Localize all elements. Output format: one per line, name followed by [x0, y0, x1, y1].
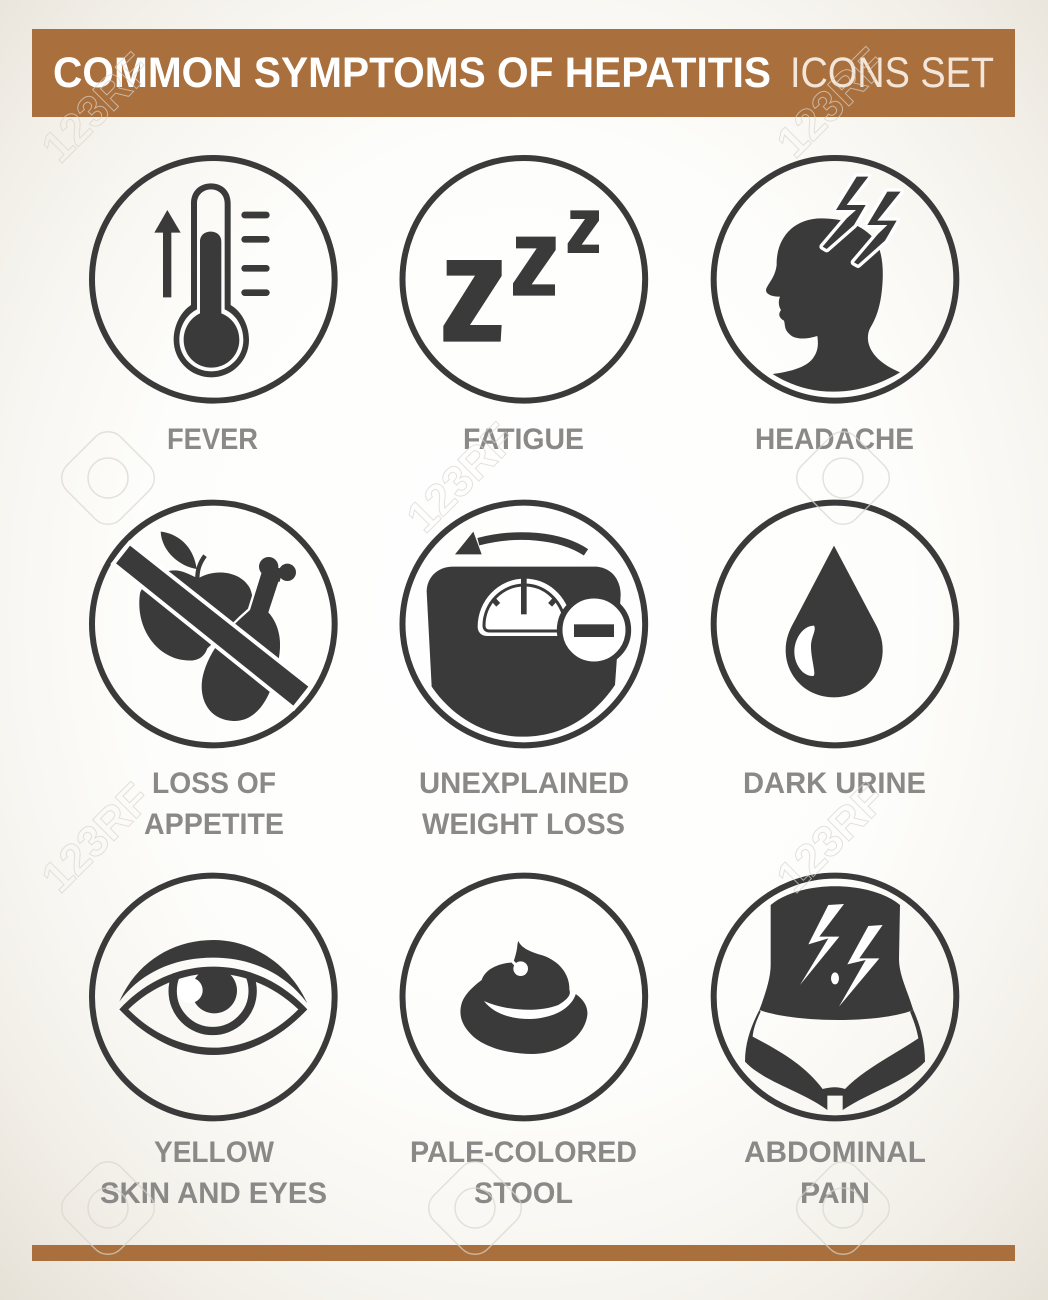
panel: fatigue	[402, 158, 645, 456]
icon: weighing scale	[402, 503, 645, 745]
watermark: 123RF	[767, 39, 895, 167]
label: STOOL	[474, 1177, 573, 1210]
label: DARK URINE	[743, 767, 926, 800]
label	[419, 767, 629, 841]
label: SKIN AND EYES	[100, 1177, 327, 1210]
label	[410, 1136, 637, 1210]
icon: thermometer	[92, 158, 335, 401]
label: PAIN	[800, 1177, 870, 1210]
watermark: 123RF	[767, 774, 895, 902]
panel: unexplained weight loss	[402, 503, 645, 841]
label: FEVER	[167, 423, 258, 456]
label: HEADACHE	[755, 423, 914, 456]
label: APPETITE	[144, 808, 284, 841]
icon: crossed out food	[92, 503, 335, 745]
panel: yellow skin and eyes	[92, 876, 335, 1210]
icon: eye	[92, 876, 335, 1118]
label	[744, 1136, 926, 1210]
panel: fever	[92, 158, 335, 456]
label	[100, 1136, 327, 1210]
panel: headache	[714, 158, 956, 456]
watermark: 123RF	[397, 414, 525, 542]
label: UNEXPLAINED	[419, 767, 629, 800]
panel: pale-colored stool	[402, 876, 645, 1210]
icon: head with lightning	[714, 158, 956, 401]
subtitle: ICONS SET	[790, 49, 994, 97]
panel: dark urine	[714, 503, 956, 800]
icon: abdomen with lightning	[714, 876, 956, 1118]
watermark: 123RF	[32, 44, 160, 172]
label: LOSS OF	[152, 767, 276, 800]
title banner	[32, 29, 1015, 117]
label: PALE-COLORED	[410, 1136, 637, 1169]
watermark: 123RF	[32, 774, 160, 902]
panel: loss of appetite	[92, 503, 335, 841]
label	[144, 767, 284, 841]
icon: stool	[402, 876, 645, 1118]
watermark	[32, 39, 897, 1262]
bottom bar	[32, 1245, 1015, 1261]
label: ABDOMINAL	[744, 1136, 926, 1169]
label: WEIGHT LOSS	[422, 808, 625, 841]
title: COMMON SYMPTOMS OF HEPATITIS	[53, 49, 771, 97]
panel: abdominal pain	[714, 876, 956, 1210]
label: FATIGUE	[463, 423, 584, 456]
icon: drop	[714, 503, 956, 745]
label: YELLOW	[154, 1136, 275, 1169]
icon: sleep z letters	[402, 158, 645, 401]
